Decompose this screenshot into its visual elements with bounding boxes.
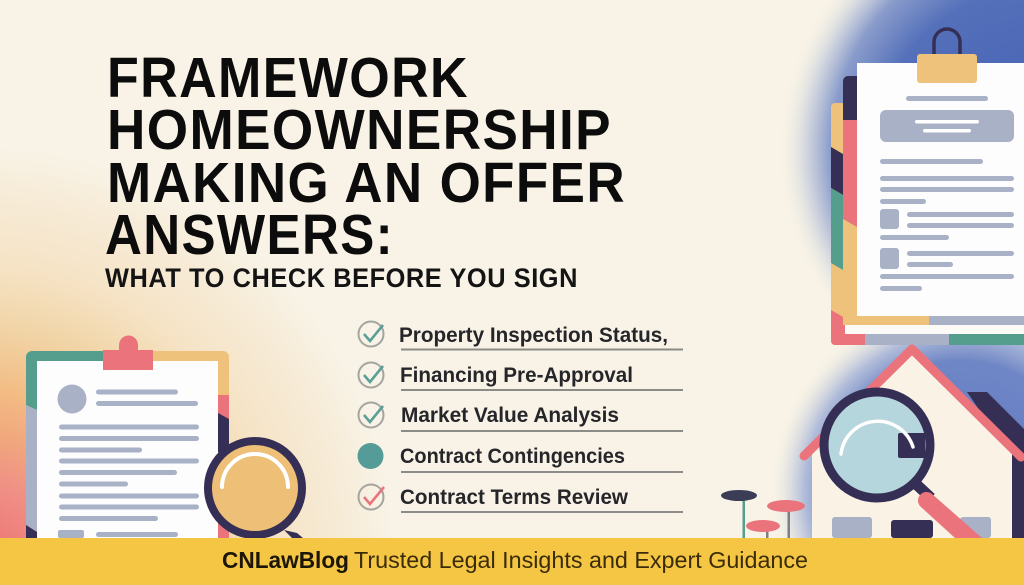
document lines — [58, 390, 199, 538]
item: contract contingencies — [358, 443, 683, 473]
subtitle: WHAT TO CHECK BEFORE YOU SIGN — [105, 263, 578, 293]
lens notch — [898, 433, 925, 458]
item: contract contingencies: Contract Contingencies — [400, 444, 625, 468]
lens — [208, 441, 302, 535]
stacked clipboard, top right — [831, 29, 1024, 345]
footer tagline: Trusted Legal Insights and Expert Guidance — [354, 547, 808, 573]
house illustration — [804, 349, 1024, 538]
clip — [917, 54, 977, 83]
door — [891, 520, 933, 538]
roof — [804, 349, 1021, 457]
clip — [103, 336, 153, 370]
item: contract terms review: Contract Terms Review — [400, 485, 628, 509]
item: market value analysis: Market Value Analysis — [401, 403, 619, 427]
lens highlight — [841, 421, 913, 454]
handle — [284, 530, 303, 538]
footer bar — [0, 538, 1024, 585]
board — [26, 351, 229, 538]
handle — [916, 484, 931, 498]
small plants — [721, 490, 805, 538]
back sheet — [831, 103, 1024, 345]
magnifier, bottom left — [208, 441, 303, 538]
clip ring — [934, 29, 960, 54]
title: FRAMEWORK — [107, 46, 469, 110]
document lines — [880, 96, 1014, 291]
house body — [812, 352, 1012, 538]
lens highlight — [222, 454, 288, 487]
title — [105, 46, 626, 267]
item: financing pre-approval: Financing Pre-Approval — [400, 363, 633, 387]
title: ANSWERS: — [105, 203, 394, 267]
footer brand: CNLawBlog — [222, 547, 349, 573]
avatar — [58, 384, 86, 414]
clipboard, bottom left — [26, 336, 229, 538]
lens — [824, 392, 930, 498]
item: property inspection status: Property Inspection Status, — [399, 323, 668, 347]
item: financing pre-approval — [358, 362, 683, 391]
paper — [37, 361, 218, 538]
paper — [857, 63, 1024, 316]
title: HOMEOWNERSHIP — [107, 98, 612, 162]
windows — [832, 517, 991, 538]
item: contract terms review — [358, 484, 683, 513]
magnifier over house — [824, 392, 982, 538]
checklist — [358, 322, 683, 513]
title: MAKING AN OFFER — [107, 151, 626, 215]
dark side roof — [967, 392, 1024, 538]
item: market value analysis — [358, 402, 683, 432]
middle sheet — [843, 76, 1024, 325]
